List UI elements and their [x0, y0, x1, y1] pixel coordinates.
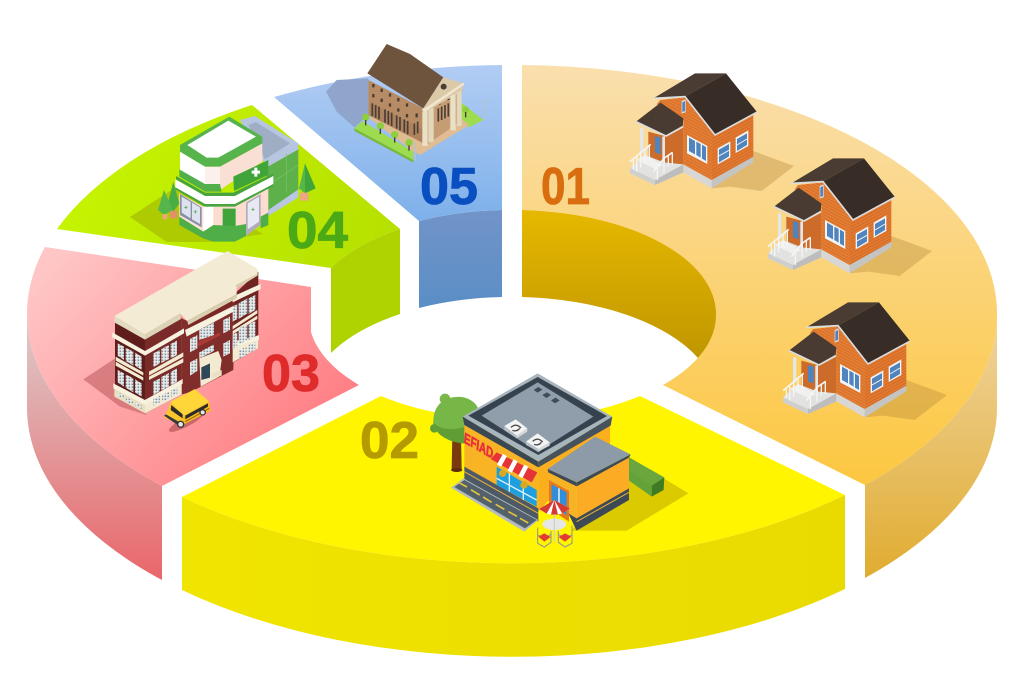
patio table and umbrella: [538, 500, 572, 547]
label: 05: 05: [420, 158, 478, 216]
building: brick school with bus: [83, 251, 261, 435]
segment 03 top face: [27, 247, 359, 486]
segment 01 outer wall: [865, 314, 997, 578]
panel: segment 02 yellow: [182, 396, 845, 657]
panel: segment 05 blue: [274, 65, 502, 308]
label: 03: 03: [262, 345, 320, 403]
building: corner cafe shop: [430, 373, 688, 547]
label: 02: 02: [360, 412, 419, 470]
segment 04 inner wall: [331, 229, 400, 353]
building: green pharmacy: +: [184, 204, 188, 211]
shop window: [497, 467, 537, 507]
segment 03 outer wall: [27, 314, 162, 580]
tree: [430, 394, 479, 472]
hedge: [628, 457, 664, 497]
annex: [548, 437, 631, 531]
houses: row of three brick homes: [630, 73, 947, 420]
shop sign: EFIAD: [463, 430, 494, 463]
panel: segment 01 orange: [522, 65, 997, 578]
segment 01 inner wall: [522, 210, 717, 358]
segment 01 top face: [522, 65, 997, 485]
sidewalk: [451, 478, 538, 532]
segment 05 top face: [274, 65, 502, 221]
segment 02 outer wall: [182, 495, 845, 657]
building: green pharmacy: [130, 116, 316, 242]
house 3: [783, 302, 947, 420]
school base: [114, 335, 258, 413]
school bus: [164, 389, 211, 435]
building: bank with columns: [326, 44, 489, 163]
rooftop AC units: [504, 419, 550, 452]
panel: segment 03 red: [27, 247, 359, 580]
segment 02 top face: [182, 396, 845, 563]
building: green pharmacy: +: [193, 209, 197, 216]
panel: segment 04 green: [57, 105, 400, 353]
segment 05 inner wall: [419, 210, 502, 308]
house 2: [768, 158, 932, 276]
building: green pharmacy: +: [251, 206, 255, 213]
awning: [491, 452, 537, 482]
house 1: [630, 73, 794, 191]
label: 01: 01: [541, 158, 590, 216]
label: 04: 04: [287, 202, 348, 260]
segment 04 top face: [57, 105, 400, 268]
